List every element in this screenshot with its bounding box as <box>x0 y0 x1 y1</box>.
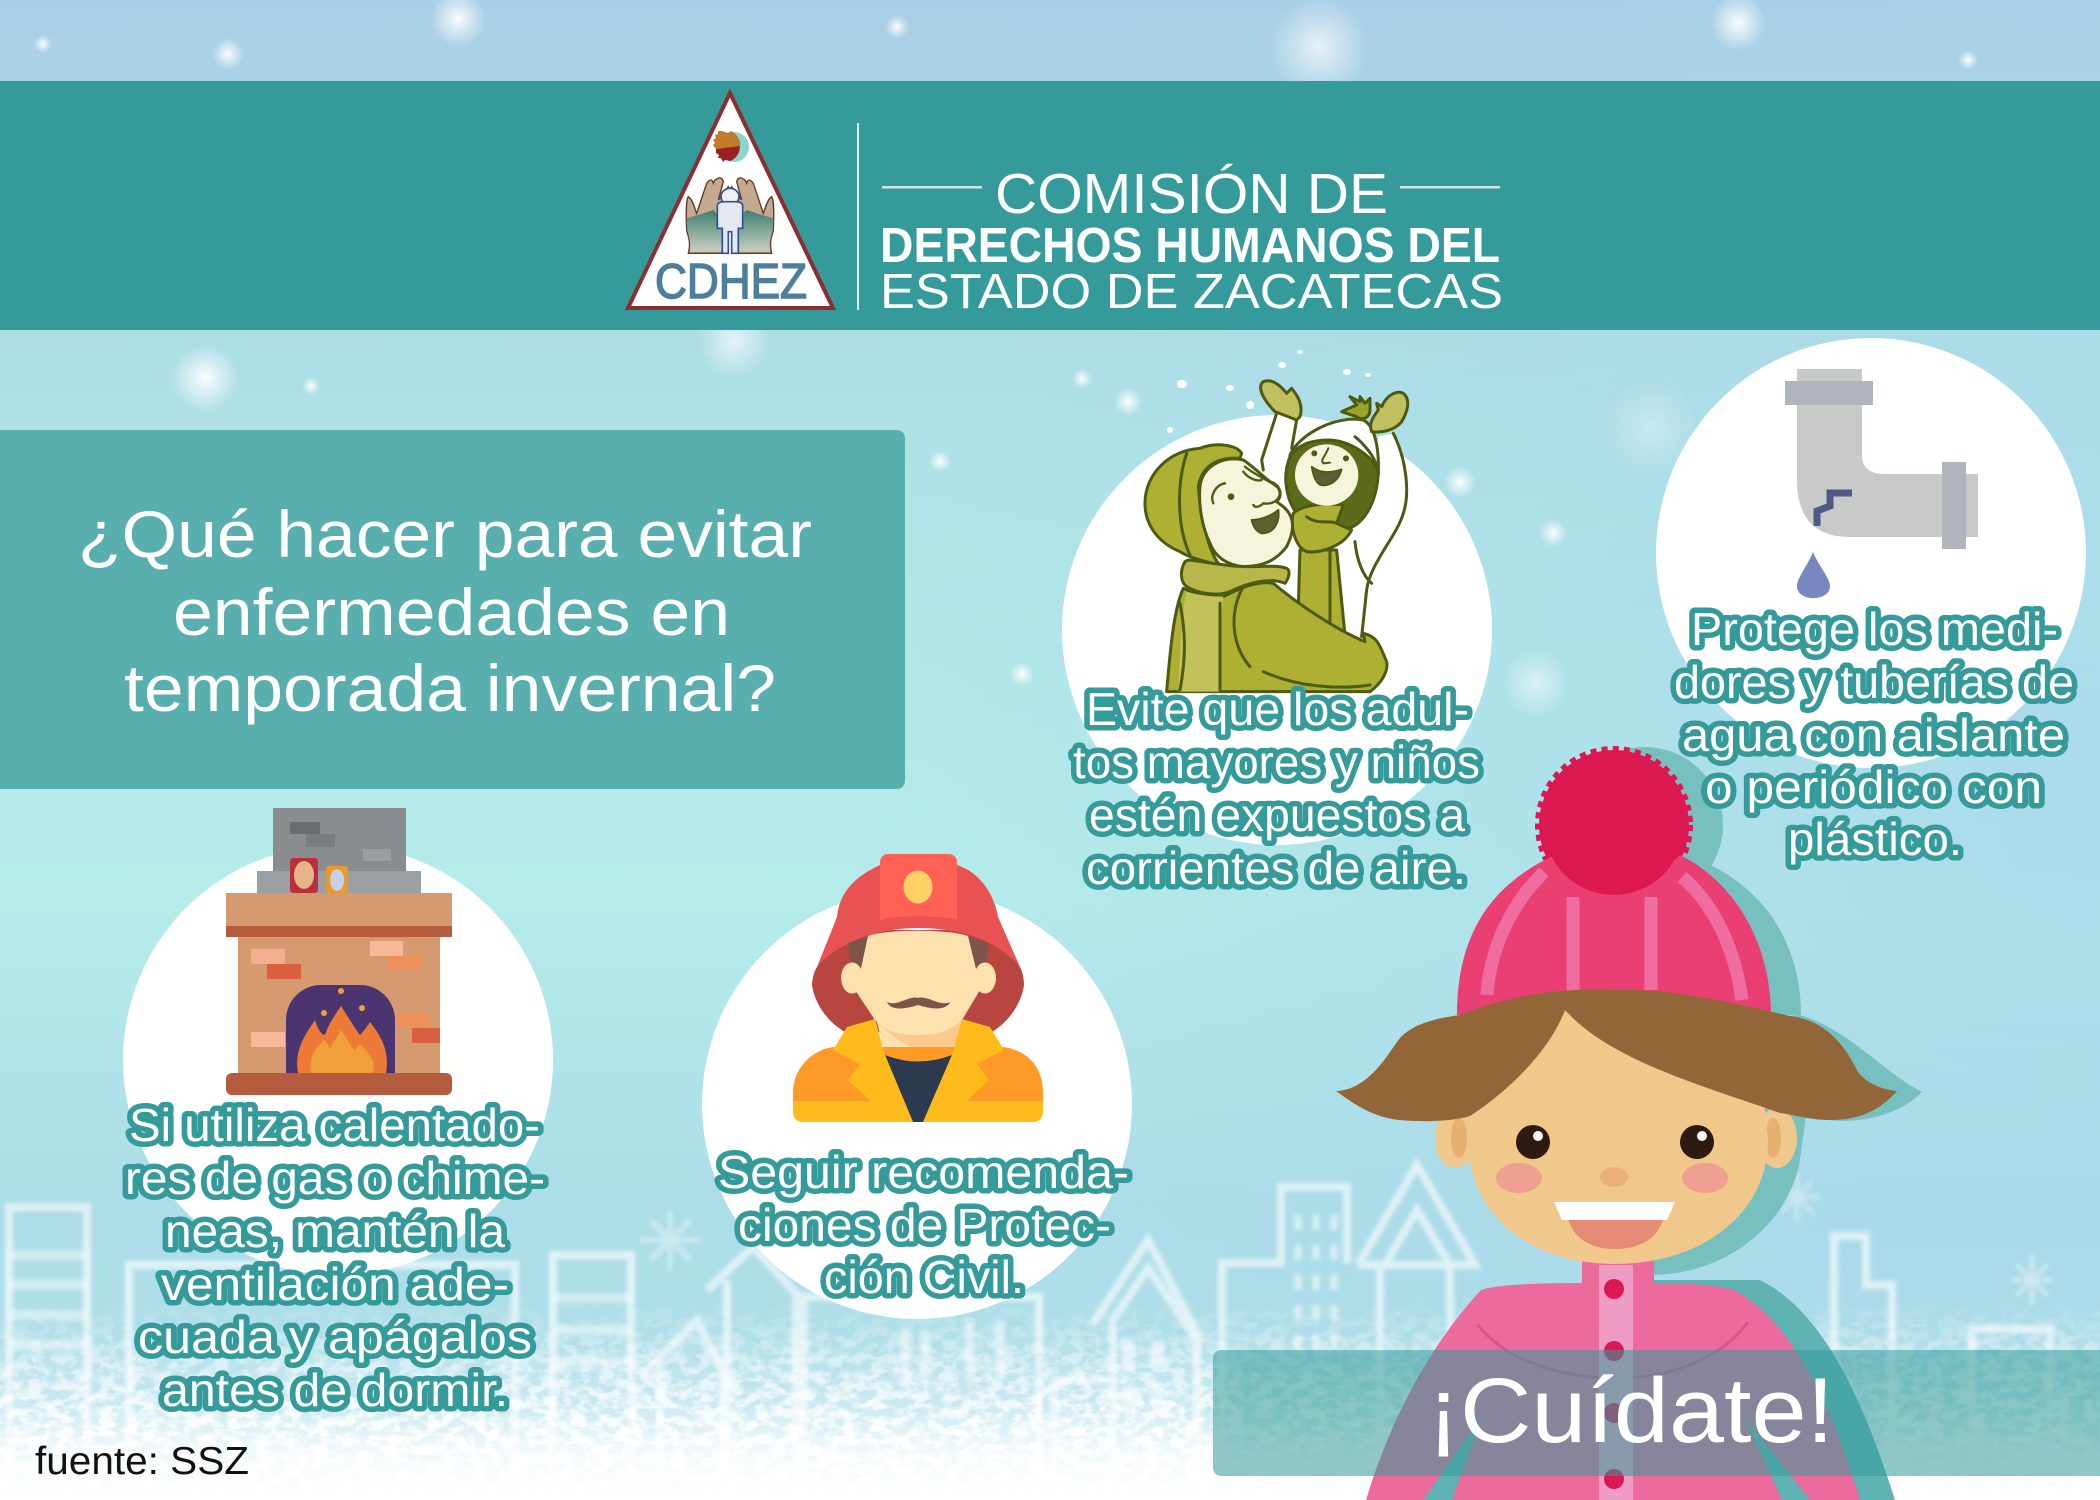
child hair <box>1286 440 1378 530</box>
text: air currents tip <box>1073 683 1480 894</box>
mouth <box>1567 1215 1664 1249</box>
text: pipes tip: Protege los medi- <box>1691 603 2058 655</box>
child mittens <box>1261 381 1408 432</box>
pom-pom <box>1539 750 1689 900</box>
snowy ground fog <box>0 1300 2100 1500</box>
text: fireplace tip: ventilación ade- <box>161 1258 509 1310</box>
organisation name <box>857 123 1503 319</box>
text: air currents tip: corrientes de aire. <box>1086 842 1466 894</box>
cheeks and nose <box>1496 1163 1542 1193</box>
callout: Cuídate <box>1213 1350 2100 1476</box>
face <box>1468 1005 1768 1264</box>
title panel: enfermedades en <box>173 575 730 649</box>
adult scarf <box>1181 560 1289 594</box>
organisation name: DERECHOS HUMANOS DEL <box>880 219 1500 273</box>
child white coat and arms <box>1262 413 1297 473</box>
ears <box>1435 1108 1475 1168</box>
tip: elders circle <box>1062 415 1492 845</box>
icon: leaking pipe <box>1785 369 1978 598</box>
logo: hands and figure <box>686 178 774 253</box>
tip: firefighter circle <box>702 889 1132 1319</box>
source note: fuente: SSZ <box>35 1440 249 1483</box>
neck and collar <box>1582 1255 1654 1295</box>
text: fireplace tip: Si utiliza calentado- <box>129 1099 540 1151</box>
adult body <box>1167 583 1387 692</box>
pom-pom front <box>1544 755 1684 895</box>
eyes <box>1516 1125 1550 1159</box>
text: pipes tip: plástico. <box>1788 813 1962 865</box>
text: pipes tip <box>1674 603 2074 865</box>
adult face <box>1200 459 1293 567</box>
text: pipes tip: agua con aislante <box>1682 709 2065 761</box>
text: fireplace tip: res de gas o chime- <box>125 1152 545 1204</box>
text: air currents tip: estén expuestos a <box>1089 789 1465 841</box>
text: fireplace tip: antes de dormir. <box>162 1364 508 1416</box>
text: civil protection tip: ciones de Protec- <box>738 1199 1111 1251</box>
tip: pipe circle <box>1656 338 2086 768</box>
tip: fireplace circle <box>123 845 553 1275</box>
child arm <box>1298 550 1345 635</box>
text: fireplace tip: cuada y apágalos <box>138 1311 532 1363</box>
child pom-pom <box>1342 397 1370 419</box>
adult hat <box>1145 445 1242 565</box>
character: girl with winter clothes <box>1336 747 1922 1500</box>
text: pipes tip: o periódico con <box>1705 761 2042 813</box>
header band <box>0 81 2100 330</box>
callout: Cuídate: ¡Cuídate! <box>1427 1360 1834 1462</box>
text: pipes tip: dores y tuberías de <box>1674 656 2074 708</box>
child hood <box>1290 419 1378 473</box>
text: civil protection tip <box>718 1146 1129 1303</box>
organisation name: ESTADO DE ZACATECAS <box>880 265 1503 319</box>
text: air currents tip: tos mayores y niños <box>1073 736 1480 788</box>
text: air currents tip: Evite que los adul- <box>1086 683 1469 735</box>
snow bokeh <box>34 0 1978 717</box>
text: civil protection tip: Seguir recomenda- <box>718 1146 1129 1198</box>
text: fireplace tip <box>125 1099 545 1416</box>
snowflakes around figures <box>1167 350 1371 433</box>
coat <box>1366 1283 1860 1500</box>
child face <box>1295 444 1358 506</box>
title panel <box>0 430 905 789</box>
city skyline <box>9 1165 2054 1500</box>
organisation name: COMISIÓN DE <box>995 162 1388 226</box>
text: civil protection tip: ción Civil. <box>824 1251 1024 1303</box>
title panel: ¿Qué hacer para evitar <box>78 497 812 571</box>
title panel: temporada invernal? <box>124 651 776 725</box>
icon: firefighter <box>793 854 1043 1122</box>
logo: CDHEZ triangle <box>628 93 833 309</box>
text: fireplace tip: neas, mantén la <box>165 1205 505 1257</box>
girl shadow <box>1430 747 1922 1500</box>
logo wordmark: CDHEZ <box>655 255 807 309</box>
icon: fireplace <box>226 808 452 1095</box>
hat <box>1457 855 1771 1015</box>
child scarf <box>1292 504 1352 552</box>
hair <box>1336 990 1897 1121</box>
icon: adult and child in the snow <box>1145 381 1408 692</box>
